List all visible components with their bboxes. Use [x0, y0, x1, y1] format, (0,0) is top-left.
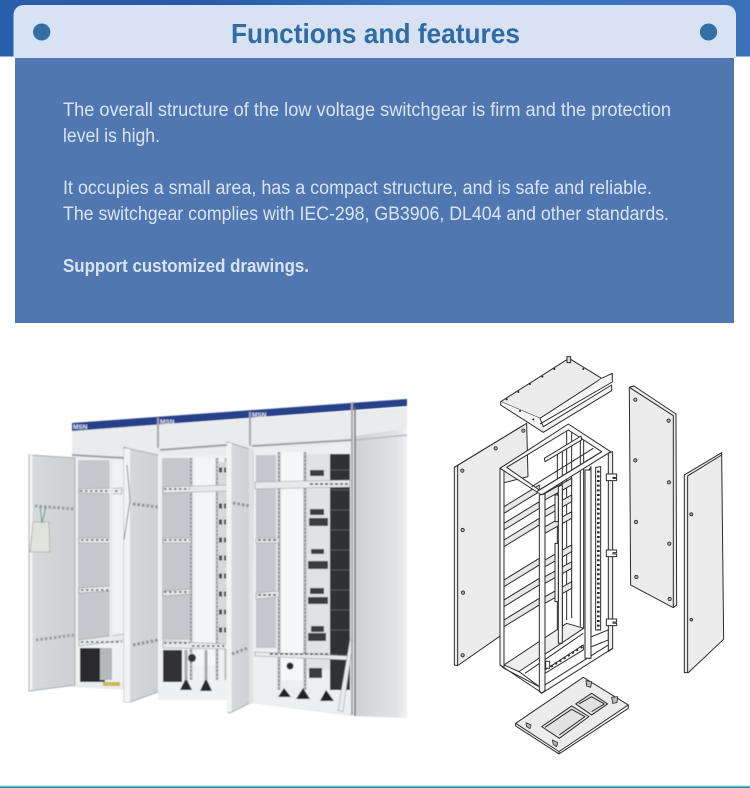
- cabinet body: [72, 407, 407, 718]
- interior bay two: [158, 455, 228, 700]
- top panel: [501, 357, 612, 432]
- band labels: MSN: [252, 412, 267, 419]
- title: Functions and features: [231, 18, 520, 49]
- bottom panel: [516, 677, 628, 754]
- interior bay three: [250, 444, 353, 714]
- band labels: MSN: [73, 424, 88, 431]
- lower edges: [500, 645, 613, 693]
- body panel: [15, 58, 734, 323]
- door three: [227, 442, 253, 713]
- paragraph one: The overall structure of the low voltage switchgear is firm and the protection: [63, 100, 671, 121]
- band labels: [73, 412, 267, 431]
- paragraph one: [63, 100, 671, 147]
- horizontal mounting rails, upper: [504, 478, 572, 547]
- centre bars: [558, 470, 591, 658]
- cabinet frame: [500, 424, 617, 693]
- right dot: [700, 24, 717, 40]
- bay frame tops: [72, 440, 352, 458]
- band labels: MSN: [160, 419, 175, 426]
- right upright: [608, 452, 613, 652]
- rear uprights: [557, 427, 584, 643]
- front upright: [539, 494, 545, 693]
- paragraph two: It occupies a small area, has a compact structure, and is safe and reliable.: [63, 178, 652, 199]
- paragraph one: level is high.: [63, 126, 160, 147]
- right rear panel: [629, 386, 677, 608]
- top frame: [500, 424, 611, 495]
- clips: [546, 474, 617, 668]
- door one: [29, 455, 75, 691]
- top blue band: [0, 0, 750, 56]
- left side panel: [454, 423, 528, 666]
- exploded drawing of cabinet frame: [454, 357, 724, 754]
- right side panel: [355, 428, 407, 718]
- header card: [14, 5, 736, 58]
- door two: [124, 447, 159, 702]
- paragraph two: [63, 178, 669, 225]
- photo: low voltage switchgear cabinets: [29, 399, 407, 718]
- bottom teal rule: [0, 785, 750, 788]
- navy top band: [72, 399, 407, 431]
- cabinet divider posts: [158, 402, 352, 715]
- horizontal mounting rails, lower: [504, 545, 572, 627]
- bottom frame: [504, 623, 584, 688]
- punched strip: [596, 467, 601, 630]
- panel: functions and features: [14, 5, 736, 323]
- left upright: [500, 468, 504, 668]
- paragraph two: The switchgear complies with IEC-298, GB3906, DL404 and other standards.: [63, 204, 669, 225]
- bold note: Support customized drawings.: [63, 255, 309, 276]
- left dot: [33, 24, 50, 40]
- right door panel: [684, 453, 724, 673]
- interior bay one: [75, 459, 125, 686]
